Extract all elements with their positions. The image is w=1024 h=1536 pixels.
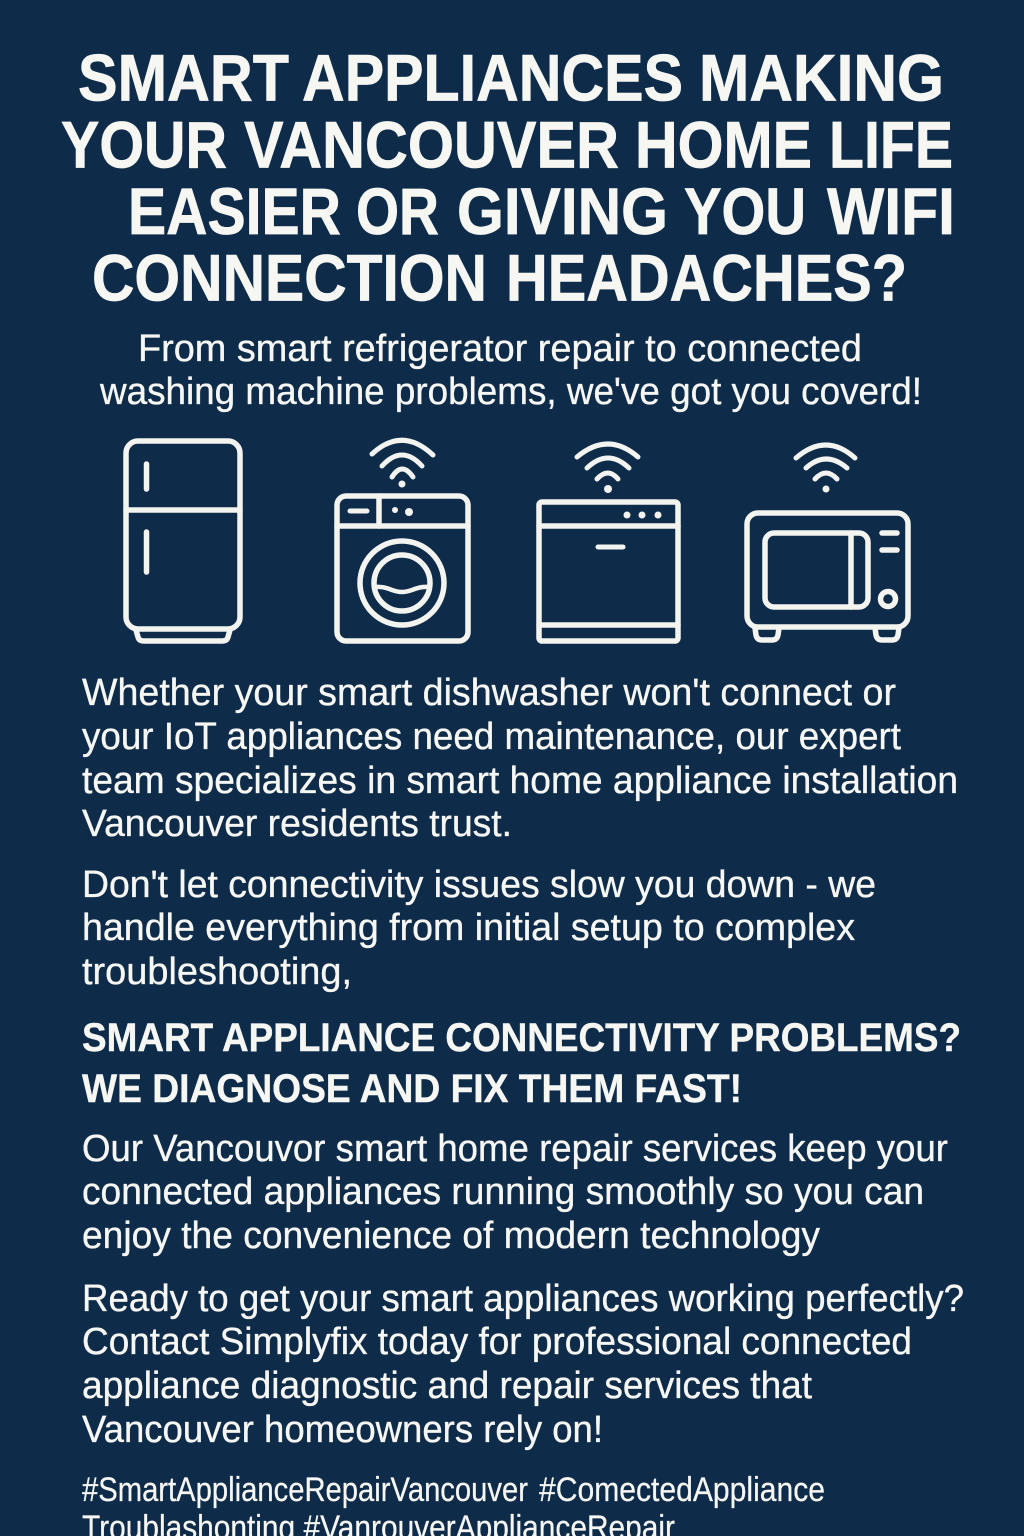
title: SMART	[78, 40, 289, 114]
text block: repair services	[82, 1128, 948, 1257]
text block: expert team: your IoT appliances need maintenance, our expert	[82, 716, 901, 758]
icon: refrigerator	[126, 441, 240, 641]
text block: expert team: team specializes in smart home appliance installation	[82, 760, 958, 802]
title	[61, 40, 955, 314]
title: CONNECTION	[92, 240, 487, 314]
subtitle	[99, 328, 922, 413]
title: APPLIANCES	[302, 40, 683, 114]
text block: connectivity issues	[82, 864, 876, 993]
title: HOME	[635, 108, 812, 182]
text block: call to action: Ready to get your smart appliances working perfectly?	[82, 1278, 964, 1320]
subtitle: From smart refrigerator repair to connected	[138, 328, 862, 370]
title: LIFE	[829, 108, 953, 182]
hashtags	[82, 1471, 825, 1536]
heading: diagnose and fix: SMART APPLIANCE CONNECTIVITY PROBLEMS?	[82, 1016, 961, 1060]
subtitle: washing machine problems, we've got you coverd!	[99, 371, 922, 413]
text block: connectivity issues: Don't let connectivity issues slow you down - we	[82, 864, 876, 906]
text block: expert team: Vancouver residents trust.	[82, 803, 512, 845]
title: MAKING	[699, 40, 944, 114]
icon row: appliances	[126, 440, 908, 641]
text block: connectivity issues: troubleshooting,	[82, 951, 352, 993]
text block: repair services: connected appliances running smoothly so you can	[82, 1171, 924, 1213]
title: YOU	[684, 174, 806, 248]
icon: smart dishwasher	[539, 444, 678, 641]
text block: expert team	[82, 672, 958, 845]
text block: call to action: Vancouver homeowners rely on!	[82, 1409, 603, 1451]
hashtags: #SmartApplianceRepairVancouver	[82, 1471, 528, 1509]
text block: repair services: Our Vancouvor smart home repair services keep your	[82, 1128, 948, 1170]
text block: call to action: Contact Simplyfix today for professional connected	[82, 1321, 912, 1363]
title: HEADACHES?	[506, 240, 907, 314]
title: YOUR	[61, 108, 227, 182]
title: VANCOUVER	[244, 108, 619, 182]
title: EASIER	[128, 174, 341, 248]
text block: repair services: enjoy the convenience of modern technology	[82, 1215, 820, 1257]
text block: connectivity issues: handle everything from initial setup to complex	[82, 907, 855, 949]
text block: expert team: Whether your smart dishwasher won't connect or	[82, 672, 896, 714]
icon: smart washing machine	[337, 440, 468, 641]
text block: call to action	[82, 1278, 964, 1451]
title: WIFI	[827, 174, 955, 248]
title: OR	[356, 174, 439, 248]
heading: diagnose and fix	[82, 1016, 961, 1111]
hashtags: #ComectedAppliance	[539, 1471, 825, 1509]
title: GIVING	[457, 174, 668, 248]
heading: diagnose and fix: WE DIAGNOSE AND FIX THEM FAST!	[82, 1067, 742, 1111]
text block: call to action: appliance diagnostic and repair services that	[82, 1365, 812, 1407]
icon: smart microwave	[747, 445, 908, 640]
